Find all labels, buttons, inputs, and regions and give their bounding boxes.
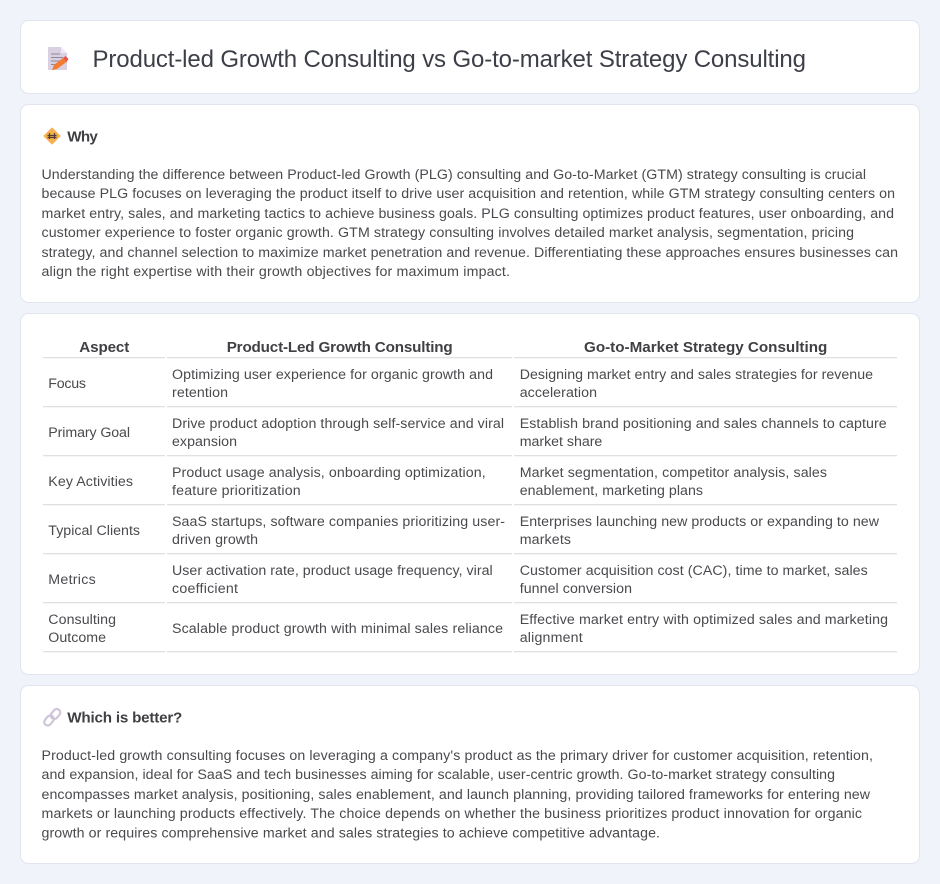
table row: primary goal: market share	[520, 434, 602, 450]
table header row: Aspect	[79, 339, 129, 356]
table row: primary goal: Establish brand positioning and sales channels to capture	[520, 416, 887, 432]
heading: which is better: Which is better?	[67, 710, 182, 727]
table row: focus: acceleration	[520, 385, 597, 401]
table row: focus	[43, 367, 897, 407]
panel: title header	[20, 20, 920, 94]
table row: key activities: Product usage analysis, onboarding optimization,	[172, 465, 486, 481]
table row: metrics: Customer acquisition cost (CAC), time to market, sales	[520, 563, 868, 579]
table row: typical clients: Enterprises launching new products or expanding to new	[520, 514, 880, 530]
text block: why paragraph: align the right expertise with their growth objectives for maximum impact.	[42, 264, 510, 280]
table row: typical clients	[43, 514, 897, 554]
table row: primary goal: Drive product adoption through self-service and viral	[172, 416, 504, 432]
table row: typical clients: Typical Clients	[48, 523, 140, 539]
text block: which is better paragraph: and expansion, ideal for SaaS and tech businesses aiming for scalable, user-centric growth. Go-to-market strategy consulting	[42, 767, 835, 783]
text block: why paragraph	[42, 167, 898, 280]
table row: consulting outcome	[43, 612, 897, 652]
text block: which is better paragraph: markets or launching products effectively. The choice depends on whether the business prioritizes product innovation for organic	[42, 806, 862, 822]
table row: key activities: Key Activities	[48, 474, 133, 490]
panel: why	[20, 104, 920, 302]
text block: why paragraph: Understanding the difference between Product-led Growth (PLG) consulting and Go-to-Market (GTM) strategy consulting is crucial	[42, 167, 866, 183]
table row: metrics: coefficient	[172, 581, 238, 597]
table row: focus: Focus	[48, 376, 86, 392]
text block: which is better paragraph: growth or requires comprehensive market and sales strategies to achieve competitive advantage.	[42, 826, 660, 842]
table row: consulting outcome: alignment	[520, 630, 583, 646]
table row: primary goal: Primary Goal	[48, 425, 130, 441]
table row: metrics: User activation rate, product usage frequency, viral	[172, 563, 493, 579]
table row: typical clients: markets	[520, 532, 571, 548]
text block: why paragraph: strategy, and channel selection to maximize market penetration and revenue. Differentiating these approaches ensures businesses can	[42, 245, 898, 261]
table header row: Go-to-Market Strategy Consulting	[584, 339, 827, 356]
text block: why paragraph: because PLG focuses on leveraging the product itself to drive user acquisition and retention, while GTM strategy consulting centers on	[42, 186, 895, 202]
table row: typical clients: SaaS startups, software companies prioritizing user-	[172, 514, 505, 530]
table header row: Product-Led Growth Consulting	[227, 339, 453, 356]
table row: typical clients: driven growth	[172, 532, 258, 548]
table row: focus: retention	[172, 385, 228, 401]
table row: metrics: Metrics	[48, 572, 96, 588]
table row: consulting outcome: Outcome	[48, 630, 106, 646]
table header row	[43, 339, 897, 358]
table row: primary goal	[43, 416, 897, 456]
title: Product-led Growth Consulting vs Go-to-market Strategy Consulting	[92, 46, 806, 73]
table row: consulting outcome: Scalable product growth with minimal sales reliance	[172, 621, 503, 637]
icon: orange diamond sign	[44, 128, 60, 144]
table row: consulting outcome: Effective market entry with optimized sales and marketing	[520, 612, 888, 628]
panel: comparison table	[20, 314, 920, 674]
table row: primary goal: expansion	[172, 434, 237, 450]
table row: focus: Optimizing user experience for organic growth and	[172, 367, 493, 383]
table row: focus: Designing market entry and sales strategies for revenue	[520, 367, 873, 383]
heading: why: Why	[67, 129, 98, 146]
text block: which is better paragraph: Product-led growth consulting focuses on leveraging a company's product as the primary driver for customer acquisition, retention,	[42, 748, 873, 764]
text block: which is better paragraph	[42, 748, 873, 842]
icon: document with pencil	[48, 47, 68, 70]
text block: why paragraph: customer experience to foster organic growth. GTM strategy consulting involves detailed market analysis, segmentation, pricing	[42, 225, 854, 241]
table row: metrics	[43, 563, 897, 603]
text block: why paragraph: market entry, sales, and marketing tactics to achieve business goals. PLG consulting optimizes product features, user onboarding, and	[42, 206, 894, 222]
table row: key activities: Market segmentation, competitor analysis, sales	[520, 465, 827, 481]
icon: chain link	[43, 708, 62, 727]
panel: which is better	[20, 686, 920, 864]
table row: key activities	[43, 465, 897, 505]
text block: which is better paragraph: encompasses market analysis, positioning, sales enablement, and launch planning, providing tailored frameworks for entering new	[42, 787, 871, 803]
table row: key activities: feature prioritization	[172, 483, 301, 499]
table row: consulting outcome: Consulting	[48, 612, 116, 628]
table row: metrics: funnel conversion	[520, 581, 632, 597]
table row: key activities: enablement, marketing plans	[520, 483, 703, 499]
